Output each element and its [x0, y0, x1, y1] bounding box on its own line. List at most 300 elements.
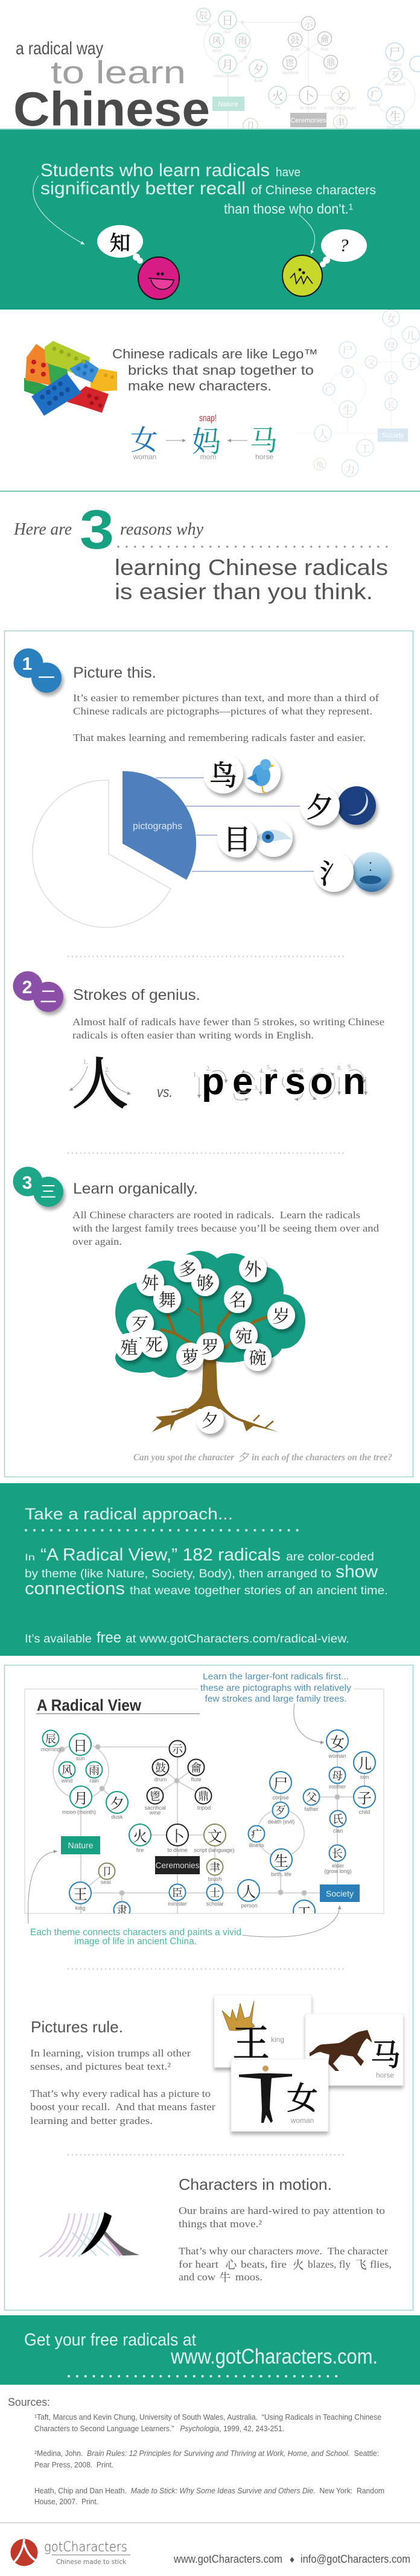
character leaves: 舞 — [158, 1286, 176, 1312]
callout: themes connect characters — [30, 1927, 241, 1947]
society radicals: 歹 — [275, 1802, 286, 1818]
society radicals: woman — [328, 1753, 346, 1759]
badge: reason 3: 三 — [40, 1179, 57, 1202]
icon: confused student with speech bubble: ? — [339, 235, 349, 256]
faded radical diagram behind title: script (language) — [325, 106, 356, 110]
society radicals: 长 — [332, 1845, 343, 1861]
nature radicals: 雨 — [89, 1762, 100, 1778]
faded radical diagram behind title: 聿 — [336, 116, 345, 128]
society radicals: 儿 — [357, 1752, 372, 1773]
ceremony radicals: drum — [154, 1776, 167, 1783]
character leaves: 夕 — [201, 1407, 219, 1433]
text: radical view description: “A Radical View,” 182 radicals — [40, 1545, 281, 1565]
ceremony radicals: 鼎 — [198, 1788, 209, 1804]
callout: themes connect characters: Each theme connects characters and paints a vivid — [30, 1927, 241, 1938]
diagram: woman + horse snap into mom: 女 — [130, 418, 158, 458]
character leaves: 碗 — [249, 1344, 267, 1370]
society radicals: 子 — [357, 1786, 372, 1808]
society radicals: illness — [249, 1842, 264, 1848]
faded radical diagram behind title: 卩 — [246, 119, 255, 132]
diagram: woman + horse snap into mom: snap! — [199, 413, 217, 424]
text: pictures rule body: learning and better grades. — [30, 2115, 153, 2126]
logo: gotCharacters — [11, 2539, 130, 2566]
icon: bird radical: 鸟 — [209, 754, 237, 793]
faded radical diagram behind title: to divine — [301, 106, 316, 110]
icon: water radical — [314, 852, 391, 892]
chart: A Radical View diagram — [25, 1684, 384, 1922]
society radicals: 王 — [73, 1883, 88, 1903]
card: king: 王 — [232, 2013, 270, 2067]
card: horse: 马 — [371, 2031, 401, 2075]
sources: ²Medina, John. Brain Rules: 12 Principles for Surviving and Thriving at Work, Home, and School. Seattle: — [34, 2449, 379, 2458]
panel: recall band — [0, 129, 420, 310]
society radicals: 生 — [274, 1849, 288, 1871]
society radicals: clan — [333, 1828, 343, 1834]
faded radical diagram behind title: moon (month) — [213, 74, 240, 78]
theme label: Nature — [61, 1836, 100, 1854]
faded radical diagram right of Lego section: 歹 — [343, 366, 352, 378]
faded radical diagram behind title — [196, 8, 420, 133]
faded radical diagram right of Lego section: 母 — [387, 339, 395, 350]
card: woman: woman — [290, 2116, 314, 2125]
sources: House, 2007. Print. — [34, 2497, 98, 2506]
text: radical view description: In — [25, 1553, 35, 1563]
icon: bird radical — [203, 754, 281, 793]
society radicals: (grow long) — [324, 1868, 352, 1874]
tree trunk and roots — [152, 1297, 278, 1432]
faded radical diagram right of Lego section: 生 — [343, 402, 352, 416]
headline: recall statement: of Chinese characters — [251, 183, 376, 197]
heading: pictures rule: Pictures rule. — [31, 2018, 123, 2036]
character leaves: 岁 — [272, 1303, 290, 1328]
character leaves: 名 — [229, 1286, 247, 1312]
faded radical diagram behind title: 龠 — [320, 33, 329, 45]
nature radicals: fire — [136, 1847, 144, 1853]
society radicals: corpse — [272, 1795, 289, 1801]
title: to learn — [51, 55, 186, 91]
text: Lego analogy: Chinese radicals are like Lego™ — [112, 346, 318, 361]
society radicals: king — [75, 1905, 85, 1911]
text: pictures rule body: senses, and pictures beat text.² — [30, 2061, 171, 2072]
theme label: Ceremonies — [155, 1856, 200, 1874]
nature radicals: moon (month) — [62, 1809, 96, 1815]
diagram: woman + horse snap into mom: 马 — [250, 419, 278, 459]
icon: moon radical — [300, 786, 376, 825]
ceremony radicals: 文 — [208, 1825, 222, 1845]
illustration: English word strokes: person — [202, 1061, 366, 1102]
ceremony radicals: 卜 — [170, 1825, 185, 1845]
nature radicals: dusk — [111, 1814, 123, 1820]
card: horse — [305, 2014, 403, 2085]
panel: get your free radicals band: Get your free radicals at — [24, 2330, 196, 2350]
text: characters in motion body: flies, — [370, 2259, 392, 2270]
faded radical diagram right of Lego section: 尸 — [343, 343, 352, 357]
text: characters in motion body: and cow — [179, 2271, 216, 2283]
panel: radical view and benefits — [5, 1665, 413, 2310]
faded radical diagram behind title: 尸 — [389, 43, 401, 60]
arrow: to Nature label — [28, 1851, 57, 1924]
faded radical diagram right of Lego section: 工 — [360, 440, 371, 455]
text: radical view description: are color-coded — [286, 1551, 374, 1563]
text: pictures rule body — [30, 2047, 215, 2126]
text: characters in motion body: moos. — [235, 2271, 262, 2283]
callout: learn larger-font radicals first — [200, 1671, 352, 1704]
character leaves: 殖 — [120, 1335, 138, 1359]
faded radical diagram behind title: sun — [224, 30, 231, 34]
headline: recall statement: have — [276, 166, 301, 179]
chart: pictograph pie — [33, 771, 314, 927]
arrow: to Society label — [243, 1906, 340, 1937]
faded radical diagram behind title: 示 — [304, 17, 313, 30]
badge: reason 1: 一 — [38, 665, 55, 689]
illustration: person radical strokes: 1. — [83, 1059, 88, 1066]
text: characters in motion body: 飞 — [355, 2256, 367, 2272]
footer contact: info@gotCharacters.com — [301, 2553, 410, 2565]
text: picture this body — [73, 692, 379, 743]
ceremony radicals: brush — [208, 1876, 221, 1882]
text: characters in motion body: 心 — [225, 2256, 237, 2272]
text: characters in motion body: 火 — [292, 2256, 304, 2272]
theme label: Ceremonies: Ceremonies — [156, 1861, 200, 1870]
theme label: Nature: Nature — [68, 1840, 94, 1850]
faded radical diagram behind title: 鼎 — [326, 56, 336, 69]
nature radicals — [41, 1731, 151, 1853]
illustration: English word strokes: 9. — [348, 1064, 352, 1070]
faded radical diagram behind title: Ceremonies — [290, 117, 326, 124]
text: radical view description: that weave together stories of an ancient time. — [130, 1585, 388, 1597]
card: woman — [231, 2059, 328, 2131]
footer contact: ♦ — [288, 2556, 296, 2565]
faded radical diagram behind title: 歹 — [390, 69, 400, 81]
character leaves: 够 — [196, 1270, 214, 1295]
ceremony radicals: 龠 — [191, 1760, 202, 1775]
faded radical diagram right of Lego section: 龟 — [316, 459, 324, 469]
text: radical view description: connections — [25, 1579, 125, 1598]
society radicals: 父 — [306, 1789, 317, 1805]
faded radical diagram behind title: Nature — [218, 101, 238, 108]
heading: characters in motion: Characters in motion. — [179, 2175, 332, 2193]
faded radical diagram behind title: flute — [320, 48, 329, 52]
diagram: woman + horse snap into mom — [130, 413, 278, 461]
faded radical diagram right of Lego section: 氏 — [387, 372, 395, 384]
title: a radical way — [16, 39, 103, 59]
faded radical diagram behind title: 风 — [212, 34, 221, 47]
faded radical diagram behind title: dusk — [254, 79, 263, 83]
sources: Sources: — [8, 2396, 50, 2408]
text: pictures rule body: That’s why every radical has a picture to — [30, 2088, 211, 2099]
faded radical diagram behind title: 辰 — [199, 8, 208, 22]
card: horse: horse — [376, 2071, 394, 2079]
character leaves: 舛 — [141, 1270, 159, 1295]
icon: happy student with speech bubble — [97, 225, 179, 299]
logo: gotCharacters: gotCharacters — [44, 2540, 127, 2555]
text: characters in motion body: 牛 — [219, 2269, 231, 2285]
tree canopy — [115, 1251, 305, 1378]
heading: picture this: Picture this. — [73, 664, 156, 681]
caption: spot the character: 夕 — [238, 1451, 250, 1463]
headline: recall statement: Students who learn radicals — [40, 161, 270, 180]
text: characters in motion body — [179, 2205, 392, 2285]
heading: here are 3 reasons: reasons why — [120, 520, 204, 539]
ceremony radicals: 聿 — [209, 1859, 220, 1875]
faded radical diagram behind title: 月 — [221, 56, 234, 72]
faded radical diagram behind title: fire — [275, 106, 281, 110]
text: pictures rule body: In learning, vision trumps all other — [30, 2047, 191, 2059]
faded radical diagram behind title: 卜 — [302, 87, 314, 104]
society radicals: child — [359, 1809, 370, 1815]
badge: reason 3: 3 — [22, 1173, 32, 1193]
nature radicals: 风 — [62, 1762, 72, 1778]
society radicals: 母 — [332, 1767, 343, 1783]
sources — [8, 2396, 384, 2506]
text: characters in motion body: Our brains are hard-wired to pay attention to — [179, 2205, 385, 2216]
society radicals: mother — [329, 1784, 346, 1790]
heading: strokes of genius: Strokes of genius. — [73, 987, 200, 1003]
text: radical view description: by theme (like Nature, Society, Body), then arranged to — [25, 1568, 331, 1580]
illustration: English word strokes: 3. — [254, 1085, 258, 1092]
badge: reason 2: 二 — [40, 984, 57, 1008]
character leaves: 死 — [145, 1331, 163, 1356]
title: A Radical View: A Radical View — [37, 1696, 142, 1714]
arrow: to unknowing student — [299, 214, 315, 254]
footer contact: www.gotCharacters.com — [173, 2553, 282, 2565]
nature radicals: wind — [61, 1778, 72, 1784]
faded radical diagram right of Lego section: Society — [382, 432, 404, 439]
icon: moon radical: 夕 — [306, 786, 334, 825]
faded radical diagram right of Lego section: 疒 — [325, 384, 333, 395]
text: strokes body: radicals is often easier than writing words in English. — [72, 1029, 314, 1041]
badge: reason 1: 1 — [22, 654, 32, 674]
society radicals: 隶 — [116, 1902, 127, 1918]
sources: ¹Taft, Marcus and Kevin Chung, University of South Wales, Australia. “Using Radicals in Teaching Chinese — [34, 2412, 381, 2422]
diagram: woman + horse snap into mom: mom — [200, 453, 216, 461]
nature radicals: sun — [76, 1755, 84, 1761]
text: characters in motion body: That’s why our characters move. The character — [179, 2245, 388, 2257]
icon: eye radical — [217, 818, 293, 857]
ceremony radicals: wine — [149, 1810, 161, 1816]
faded radical diagram right of Lego section: 女 — [386, 310, 396, 326]
icon: eye radical: 目 — [223, 818, 251, 857]
panel: take a radical approach band: Take a radical approach... — [25, 1505, 233, 1523]
title — [13, 39, 210, 136]
ceremony radicals: 卩 — [101, 1863, 112, 1879]
ceremony radicals — [99, 1740, 235, 1885]
society radicals: 女 — [330, 1731, 345, 1751]
sources: Pear Press, 2008. Print. — [34, 2460, 113, 2469]
card: king — [214, 1995, 311, 2067]
illustration: character family tree — [115, 1251, 305, 1434]
faded radical diagram behind title: morning — [196, 23, 211, 27]
faded radical diagram behind title: corpse — [389, 63, 402, 67]
diagram: woman + horse snap into mom: woman — [133, 453, 156, 461]
text: pictures rule body: boost your recall. And that means faster — [30, 2101, 215, 2113]
illustration: person radical strokes: 2. — [105, 1067, 110, 1073]
diagram: woman + horse snap into mom: horse — [255, 453, 273, 461]
character leaves: 多 — [179, 1256, 197, 1280]
text: radical view description: show — [336, 1562, 378, 1582]
theme label: Society — [320, 1884, 360, 1902]
arrow: to knowing student — [33, 176, 84, 244]
illustration: person radical strokes: 人 — [72, 1038, 129, 1120]
heading: here are 3 reasons — [13, 499, 394, 604]
connector lines — [53, 1741, 364, 1913]
ceremony radicals: 示 — [172, 1741, 183, 1757]
faded radical diagram behind title: 火 — [272, 87, 284, 104]
faded radical diagram right of Lego section: 力 — [345, 461, 355, 475]
caption: spot the character: in each of the characters on the tree? — [252, 1452, 392, 1463]
headline: recall statement — [40, 161, 376, 217]
callout: themes connect characters: image of life in ancient China. — [74, 1936, 197, 1947]
society radicals: death (evil) — [268, 1819, 294, 1825]
society radicals: 臣 — [172, 1884, 183, 1900]
text: strokes body — [72, 1016, 384, 1041]
character leaves: 萝 — [181, 1344, 199, 1369]
arrow: to large woman radical — [294, 1703, 324, 1743]
ceremony radicals: tripod — [197, 1805, 211, 1811]
text: picture this body: It’s easier to remember pictures than text, and more than a third of — [73, 692, 379, 704]
illustration: English word strokes: 2. — [206, 1066, 211, 1072]
text: versus: vs. — [157, 1084, 173, 1101]
icon: confused student with speech bubble — [282, 229, 367, 296]
sources: Characters to Second Language Learners.” Psychologia, 1999, 42, 243-251. — [34, 2424, 284, 2433]
caption: spot the character — [133, 1451, 392, 1463]
heading: here are 3 reasons: Here are — [13, 520, 72, 539]
badge: reason 2 — [13, 972, 63, 1012]
illustration: character in motion — [40, 2212, 139, 2257]
title: Chinese — [13, 82, 210, 136]
society radicals — [69, 1730, 375, 1922]
text: characters in motion body: beats, fire — [241, 2259, 287, 2270]
ceremony radicals: 鼓 — [155, 1760, 166, 1775]
faded radical diagram right of Lego section: 父 — [367, 356, 375, 368]
society radicals: 士 — [209, 1884, 220, 1900]
faded radical diagram behind title: 疒 — [370, 88, 380, 100]
faded radical diagram right of Lego section — [296, 310, 419, 477]
character leaves: 宛 — [235, 1323, 253, 1348]
text: characters in motion body: things that move.² — [179, 2218, 262, 2230]
character leaves — [115, 1255, 295, 1434]
text: strokes body: Almost half of radicals have fewer than 5 strokes, so writing Chinese — [72, 1016, 384, 1028]
text: Lego analogy — [112, 346, 318, 393]
caption: spot the character: Can you spot the character — [133, 1452, 235, 1463]
heading: here are 3 reasons: 3 — [80, 499, 114, 561]
illustration: English word strokes: 8. — [337, 1065, 342, 1072]
ceremony radicals: flute — [191, 1776, 202, 1783]
text: picture this body: Chinese radicals are pictographs—pictures of what they represent. — [73, 705, 372, 717]
chart: pictograph pie: pictographs — [133, 821, 182, 832]
character leaves: 外 — [244, 1256, 262, 1280]
text: organic body — [72, 1209, 380, 1247]
society radicals: father — [304, 1806, 319, 1812]
ceremony radicals: to divine — [167, 1847, 188, 1853]
card: woman: 女 — [287, 2073, 318, 2118]
heading: learn organically: Learn organically. — [73, 1180, 198, 1197]
society radicals: 尸 — [273, 1772, 288, 1793]
illustration: English word strokes: 5. — [267, 1064, 272, 1071]
badge: reason 3 — [13, 1167, 63, 1207]
faded radical diagram behind title: rain — [239, 49, 246, 53]
nature radicals: 月 — [74, 1786, 88, 1808]
nature radicals: 火 — [133, 1825, 147, 1845]
faded radical diagram behind title: 日 — [221, 12, 234, 28]
nature radicals: 辰 — [45, 1731, 56, 1746]
society radicals: 疒 — [251, 1826, 262, 1842]
text: Lego analogy: bricks that snap together to — [128, 363, 314, 378]
society radicals: elder — [332, 1863, 344, 1869]
nature radicals: 夕 — [110, 1792, 124, 1813]
faded radical diagram behind title: 鼓 — [290, 34, 300, 46]
society radicals: person — [241, 1903, 258, 1909]
callout: learn larger-font radicals first: these are pictographs with relatively — [200, 1683, 352, 1693]
headline: recall statement: than those who don't.¹ — [224, 201, 353, 217]
illustration: English word strokes: 1. — [193, 1072, 198, 1078]
faded radical diagram behind title: tripod — [325, 71, 336, 75]
text: organic body: over again. — [72, 1236, 122, 1247]
theme label: Society: Society — [326, 1889, 354, 1898]
heading: here are 3 reasons: is easier than you think. — [115, 579, 373, 604]
faded radical diagram right of Lego section: 长 — [387, 398, 395, 410]
footer contact — [173, 2553, 410, 2565]
faded radical diagram right of Lego section: 子 — [406, 354, 416, 369]
badge: reason 1 — [13, 648, 62, 693]
panel: get your free radicals band — [0, 2315, 420, 2385]
text: characters in motion body: for heart — [179, 2259, 218, 2270]
icon: water radical: 氵 — [320, 852, 348, 892]
faded radical diagram behind title: 生 — [389, 107, 401, 124]
faded radical diagram behind title: birth, life — [387, 126, 403, 130]
society radicals: minister — [168, 1901, 187, 1907]
faded radical diagram behind title: 文 — [334, 87, 346, 104]
faded radical diagram right of Lego section: 儿 — [406, 327, 416, 343]
panel: take a radical approach band — [0, 1483, 420, 1656]
ceremony radicals: 鬯 — [150, 1788, 161, 1804]
callout: learn larger-font radicals first: Learn the larger-font radicals first... — [203, 1671, 349, 1682]
faded radical diagram behind title: 夕 — [252, 60, 264, 77]
ceremony radicals: script (language) — [194, 1847, 235, 1853]
panel: get your free radicals band: www.gotCharacters.com. — [170, 2345, 378, 2368]
faded radical diagram behind title: drum — [290, 48, 300, 52]
illustration: English word strokes: 4. — [259, 1068, 264, 1075]
faded radical diagram behind title: death (evil) — [385, 83, 406, 87]
logo: gotCharacters: Chinese made to stick — [56, 2558, 127, 2566]
illustration: English word strokes: 6. — [300, 1067, 304, 1074]
diagram: woman + horse snap into mom: 妈 — [192, 419, 221, 460]
text: radical view description: It’s available — [25, 1633, 92, 1646]
icon: happy student with speech bubble: 知 — [110, 227, 130, 256]
character leaves: 歹 — [131, 1311, 149, 1336]
text: organic body: All Chinese characters are rooted in radicals. Learn the radicals — [72, 1209, 360, 1221]
society radicals: 人 — [241, 1880, 256, 1901]
sources: Heath, Chip and Dan Heath. Made to Stick: Why Some Ideas Survive and Others Die. New York: Random — [34, 2486, 384, 2495]
society radicals: 工 — [297, 1901, 311, 1921]
ceremony radicals: seal — [101, 1879, 110, 1885]
text: Lego analogy: make new characters. — [128, 378, 272, 393]
faded radical diagram behind title: illness — [369, 103, 381, 107]
illustration: English word strokes: 7. — [320, 1067, 325, 1074]
text: picture this body: That makes learning and remembering radicals faster and easier. — [73, 732, 366, 743]
society radicals: scholar — [206, 1901, 224, 1907]
faded radical diagram behind title: 鬯 — [285, 57, 294, 69]
icon: lego bricks — [24, 341, 117, 416]
faded radical diagram behind title: sacrifical — [282, 71, 299, 75]
text: characters in motion body: blazes, fly — [308, 2259, 351, 2270]
ceremony radicals: sacrifical — [144, 1805, 166, 1811]
panel: three reasons — [5, 631, 413, 1477]
text: organic body: with the largest family trees because you’ll be seeing them over and — [72, 1223, 380, 1234]
heading: here are 3 reasons: learning Chinese radicals — [115, 555, 388, 580]
character leaves: 罗 — [201, 1334, 219, 1359]
society radicals: 氏 — [332, 1811, 343, 1827]
